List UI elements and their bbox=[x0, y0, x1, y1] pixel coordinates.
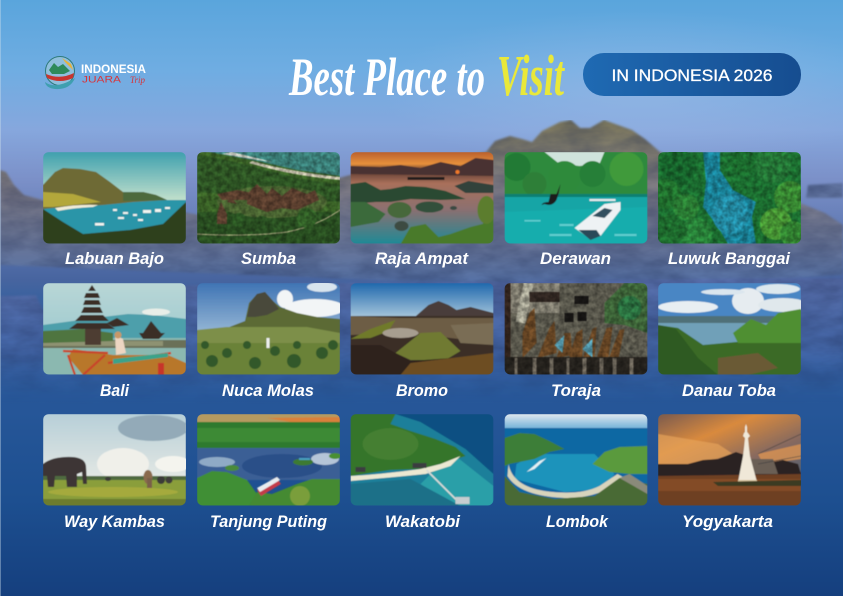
label: Yogyakarta: Yogyakarta bbox=[682, 513, 773, 531]
label: Way Kambas: Way Kambas bbox=[64, 513, 165, 531]
photo: Raja Ampat bbox=[350, 152, 496, 244]
card: Tanjung Puting bbox=[197, 414, 341, 531]
photo: Wakatobi bbox=[350, 414, 494, 506]
logo script: Trip bbox=[130, 75, 146, 85]
label: Lombok: Lombok bbox=[546, 513, 609, 531]
label: Bali: Bali bbox=[100, 382, 129, 400]
label: Wakatobi: Wakatobi bbox=[385, 513, 460, 531]
card: Danau Toba bbox=[658, 283, 808, 400]
logo bbox=[45, 56, 146, 89]
pill text: IN INDONESIA 2026 bbox=[612, 66, 772, 85]
photo: Labuan Bajo bbox=[43, 152, 186, 244]
card: Lombok bbox=[504, 414, 648, 531]
card: Derawan bbox=[502, 152, 648, 268]
card: Way Kambas bbox=[43, 414, 191, 531]
photo: Luwuk Banggai bbox=[658, 152, 801, 244]
photo: Way Kambas bbox=[43, 414, 191, 506]
label: Derawan: Derawan bbox=[540, 250, 611, 268]
card: Bali bbox=[43, 283, 186, 400]
photo: Bromo bbox=[350, 283, 494, 375]
card: Nuca Molas bbox=[197, 282, 345, 400]
title bbox=[288, 43, 565, 108]
card: Sumba bbox=[197, 152, 340, 268]
card: Yogyakarta bbox=[658, 414, 803, 531]
label: Bromo: Bromo bbox=[396, 382, 448, 400]
photo: Nuca Molas bbox=[197, 282, 345, 375]
label: Luwuk Banggai: Luwuk Banggai bbox=[668, 250, 790, 268]
card: Luwuk Banggai bbox=[658, 152, 801, 268]
photo: Lombok bbox=[504, 414, 648, 506]
card: Toraja bbox=[504, 282, 648, 400]
photo: Toraja bbox=[504, 282, 648, 375]
title yellow part: Visit bbox=[497, 43, 565, 108]
card: Labuan Bajo bbox=[43, 152, 186, 268]
card: Wakatobi bbox=[350, 414, 494, 531]
background: sky glow bbox=[380, 10, 843, 170]
title white part: Best Place to bbox=[288, 47, 485, 107]
label: Danau Toba: Danau Toba bbox=[682, 382, 776, 400]
photo: Yogyakarta bbox=[658, 414, 803, 506]
photo: Sumba bbox=[197, 152, 340, 244]
card: Raja Ampat bbox=[350, 152, 496, 268]
label: Labuan Bajo: Labuan Bajo bbox=[65, 250, 164, 268]
logo wordmark: INDONESIA bbox=[81, 64, 146, 76]
logo emblem bbox=[45, 56, 75, 89]
label: Raja Ampat: Raja Ampat bbox=[375, 250, 470, 268]
photo: Danau Toba bbox=[658, 283, 808, 375]
label: Toraja: Toraja bbox=[551, 382, 601, 400]
card: Bromo bbox=[350, 283, 494, 400]
label: Tanjung Puting: Tanjung Puting bbox=[210, 513, 327, 531]
photo: Derawan bbox=[502, 152, 648, 244]
pill badge bbox=[583, 53, 801, 96]
background: Komodo mountains bbox=[0, 120, 843, 405]
photo: Tanjung Puting bbox=[197, 414, 341, 506]
logo sub-wordmark: JUARA bbox=[82, 74, 121, 84]
left edge highlight bbox=[0, 0, 1, 596]
label: Nuca Molas: Nuca Molas bbox=[222, 382, 314, 400]
label: Sumba: Sumba bbox=[241, 250, 296, 268]
photo: Bali bbox=[43, 283, 186, 375]
